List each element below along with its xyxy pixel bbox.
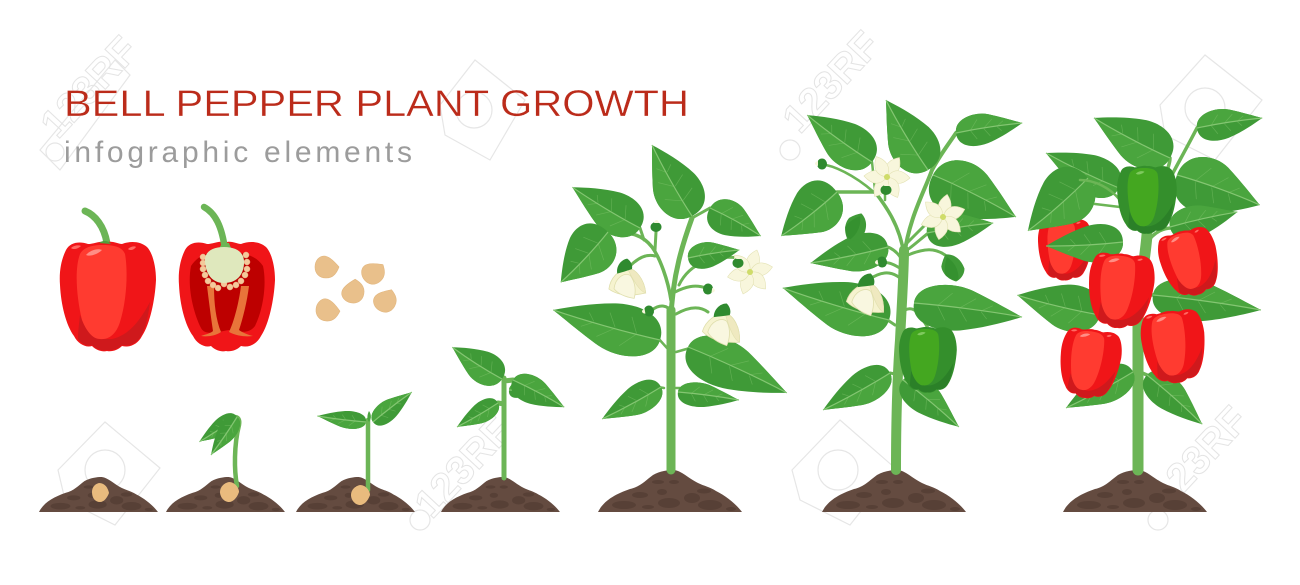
watermarks: 123RF (406, 408, 520, 526)
stage 3: seedling with two leaves (296, 384, 418, 512)
stage 6: plant with flowers and first green fruit (765, 88, 1029, 512)
watermarks: 123RF (32, 28, 146, 146)
watermarks: 123RF (1142, 398, 1256, 516)
stage 1: seed in soil (39, 477, 158, 512)
title: BELL PEPPER PLANT GROWTH (64, 83, 689, 124)
whole red bell pepper (60, 211, 156, 351)
pepper cross-section (179, 207, 275, 351)
stage 4: young plant (441, 333, 571, 512)
stage 5: flowering plant (542, 133, 797, 512)
subtitle: infographic elements (64, 136, 412, 169)
stage 7: mature plant with red peppers (1009, 97, 1269, 512)
stage 2: sprouting seedling (166, 409, 285, 512)
watermarks: 123RF (774, 23, 888, 141)
seeds (315, 256, 401, 322)
